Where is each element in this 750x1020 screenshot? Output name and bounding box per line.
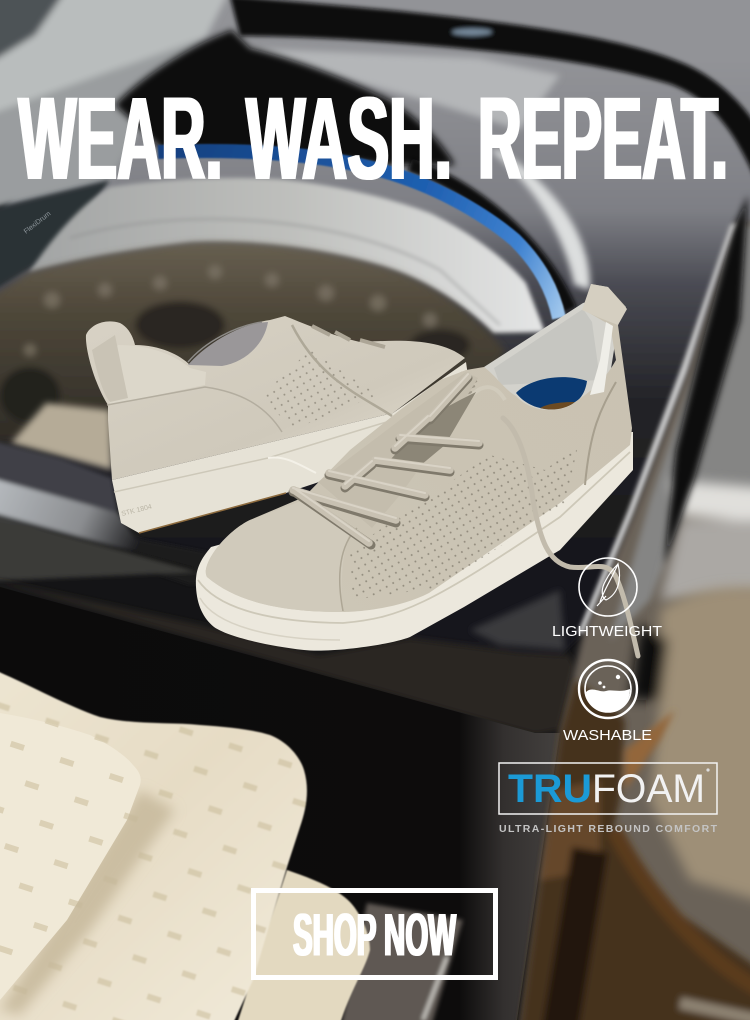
title: WEAR.: [18, 73, 222, 205]
right glossy edge: [578, 222, 736, 634]
lace throat: [318, 372, 478, 528]
front shoe: [196, 284, 638, 656]
wicker basket: [517, 680, 750, 1020]
upper: [86, 316, 465, 480]
drum water: [0, 242, 505, 445]
back shoe: [86, 316, 468, 533]
fold shadow: [0, 790, 175, 1015]
tongue logo: [452, 381, 477, 398]
title: WASH.: [246, 73, 452, 205]
trufoam logo: ULTRA-LIGHT REBOUND COMFORT: [499, 823, 718, 835]
eye stay top: [460, 387, 505, 415]
toe cap: [206, 500, 350, 612]
light inner band: [240, 48, 560, 130]
towels: [0, 668, 370, 1020]
sole: [196, 432, 633, 651]
interior: [484, 296, 618, 420]
dark label strip: [0, 180, 110, 305]
small lid label: FlexiDrum: [23, 210, 52, 236]
shop now button: SHOP NOW: [293, 902, 456, 968]
silver highlight: [490, 150, 590, 290]
grey reflection at base: [340, 903, 463, 1020]
opening wall: [29, 178, 545, 333]
seams: [340, 528, 357, 611]
lining: [188, 322, 268, 366]
heel panel: [108, 345, 206, 405]
top laces: [312, 326, 385, 347]
title: [18, 73, 728, 205]
perforations: [350, 445, 578, 600]
black upper rim: [230, 0, 750, 190]
right background: [517, 222, 750, 1020]
trufoam logo: TRU: [508, 767, 592, 811]
sole mark: STK 1804: [121, 504, 153, 518]
front panel: [0, 587, 560, 1020]
eye stay: [292, 325, 392, 416]
shop now button: [254, 890, 496, 978]
label: lightweight: LIGHTWEIGHT: [552, 624, 662, 640]
black wedge: [115, 30, 455, 165]
trufoam logo: [499, 763, 718, 835]
machine top surface: [0, 0, 750, 660]
upper: [206, 284, 632, 612]
trufoam logo: FOAM: [592, 767, 705, 811]
black stripe: [664, 195, 748, 565]
icon: feather, lightweight: [579, 558, 637, 616]
front fold: [0, 713, 141, 1000]
black band above blue: [410, 165, 570, 310]
loose lace: [503, 418, 638, 656]
heel tab: [582, 284, 627, 325]
back towel: [0, 668, 370, 1020]
blanket: [630, 587, 750, 910]
lid: [0, 0, 240, 214]
towel in drum: [11, 403, 112, 470]
perforations: [262, 350, 378, 430]
lower rim and reflection: [0, 435, 300, 585]
laces: [293, 374, 638, 656]
label: washable: WASHABLE: [563, 728, 652, 744]
front lip: [0, 575, 575, 735]
blue band: [158, 151, 559, 318]
icon: water drum, washable: [579, 660, 637, 718]
sole: [112, 362, 468, 533]
